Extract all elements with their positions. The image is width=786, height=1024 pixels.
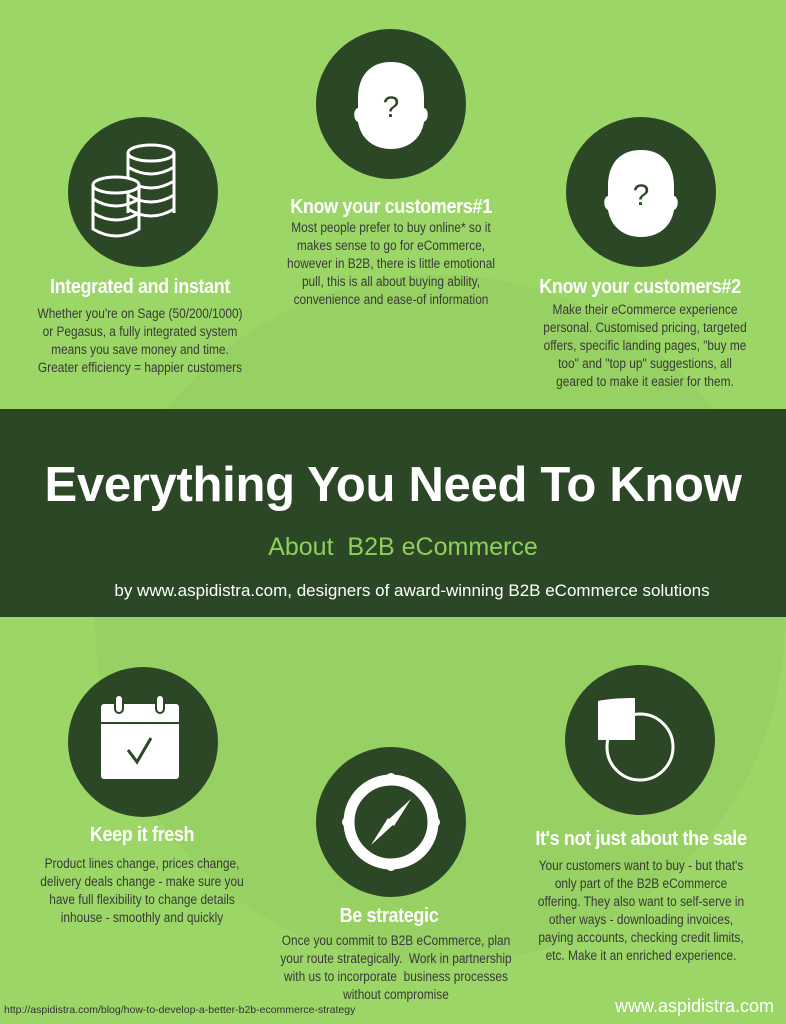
icon: head 2: ? xyxy=(633,179,649,212)
title band xyxy=(0,409,786,617)
icon: calendar xyxy=(68,667,218,817)
text: integrated: Whether you're on Sage (50/200/1000) xyxy=(37,306,243,321)
text: keep it fresh: have full flexibility to change details xyxy=(49,892,235,907)
text: customers 2: personal. Customised pricing, targeted xyxy=(543,320,747,335)
text: strategic xyxy=(280,933,512,1002)
text: customers 2: too" and "top up" suggestions, all xyxy=(558,356,732,371)
text: sale: Your customers want to buy - but that's xyxy=(539,858,743,873)
text: integrated: Greater efficiency = happier customers xyxy=(38,360,242,375)
text: integrated: or Pegasus, a fully integrated system xyxy=(43,324,237,339)
text: customers 1: pull, this is all about buying ability, xyxy=(302,274,480,289)
heading: Keep it fresh: Keep it fresh xyxy=(90,824,194,846)
text: keep it fresh: delivery deals change - make sure you xyxy=(40,874,244,889)
text: sale: paying accounts, checking credit limits, xyxy=(538,930,744,945)
icon: head 1 xyxy=(316,29,466,179)
text: sale: offering. They also want to self-serve in xyxy=(538,894,744,909)
text: strategic: Once you commit to B2B eCommerce, plan xyxy=(282,933,510,948)
text: customers 1: Most people prefer to buy online* so it xyxy=(291,220,491,235)
icon: compass xyxy=(316,747,466,897)
text: strategic: without compromise xyxy=(343,987,449,1002)
footer url: http://aspidistra.com/blog/how-to-develop-a-better-b2b-ecommerce-strategy xyxy=(4,1004,355,1016)
text: customers 2: Make their eCommerce experience xyxy=(553,302,737,317)
icon: pie xyxy=(565,665,715,815)
heading: Integrated and instant: Integrated and instant xyxy=(50,276,230,298)
text: keep it fresh xyxy=(40,856,244,925)
subtitle: About B2B eCommerce xyxy=(268,533,538,561)
text: sale: only part of the B2B eCommerce xyxy=(555,876,727,891)
text: keep it fresh: Product lines change, prices change, xyxy=(45,856,239,871)
text: keep it fresh: inhouse - smoothly and quickly xyxy=(61,910,223,925)
text: customers 1: makes sense to go for eCommerce, xyxy=(297,238,485,253)
text: strategic: with us to incorporate business processes xyxy=(284,969,508,984)
footer brand: www.aspidistra.com xyxy=(615,996,774,1016)
text: sale: other ways - downloading invoices, xyxy=(549,912,733,927)
text: customers 2: geared to make it easier for them. xyxy=(556,374,734,389)
text: customers 1 xyxy=(287,220,495,307)
heading: It's not just about the sale: It's not just about the sale xyxy=(535,828,747,850)
icon: coins xyxy=(68,117,218,267)
heading: Know your customers#1: Know your customers#1 xyxy=(290,196,492,218)
text: sale xyxy=(538,858,744,963)
byline: by www.aspidistra.com, designers of award-winning B2B eCommerce solutions xyxy=(114,581,710,600)
text: strategic: your route strategically. Work in partnership xyxy=(280,951,512,966)
heading: Know your customers#2: Know your customers#2 xyxy=(539,276,741,298)
title: Everything You Need To Know xyxy=(44,458,742,512)
text: integrated xyxy=(37,306,243,375)
heading: Be strategic: Be strategic xyxy=(340,905,438,927)
text: sale: etc. Make it an enriched experience. xyxy=(546,948,736,963)
icon: head 2 xyxy=(566,117,716,267)
icon: head 1: ? xyxy=(383,91,399,124)
text: customers 1: convenience and ease-of information xyxy=(294,292,488,307)
text: customers 1: however in B2B, there is little emotional xyxy=(287,256,495,271)
text: customers 2 xyxy=(543,302,747,389)
text: customers 2: offers, specific landing pages, "buy me xyxy=(544,338,746,353)
text: integrated: means you save money and time. xyxy=(51,342,229,357)
